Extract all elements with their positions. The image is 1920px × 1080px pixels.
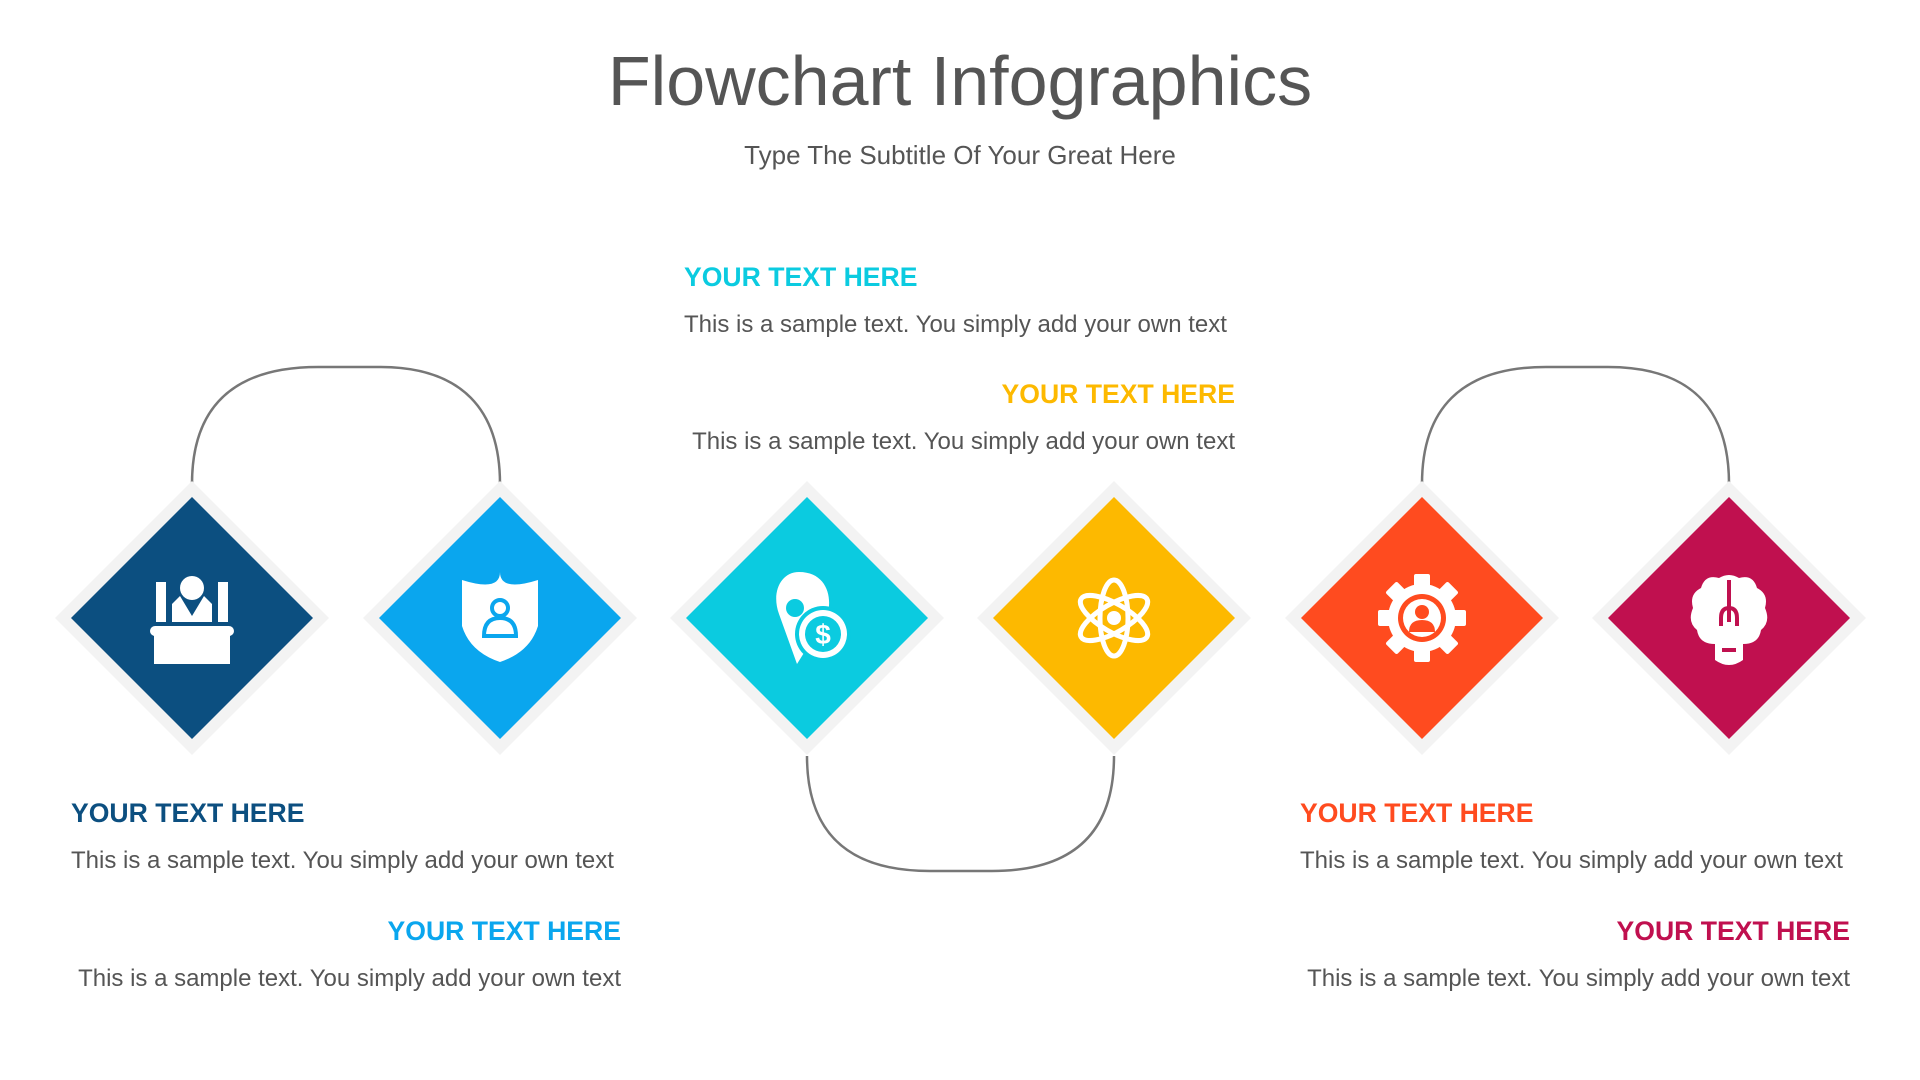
diamond 3: $	[815, 619, 831, 650]
diamond 5	[1285, 481, 1559, 755]
text block: bottom right 2: YOUR TEXT HERE	[1617, 916, 1850, 946]
text block: bottom right 1: This is a sample text. You simply add your own text	[1300, 847, 1843, 874]
text block: top center 1	[684, 262, 1227, 338]
text block: bottom right 2	[1307, 916, 1850, 992]
icon: atom	[1074, 580, 1154, 656]
text block: bottom left 1: This is a sample text. You simply add your own text	[71, 847, 614, 874]
text block: bottom left 2: YOUR TEXT HERE	[388, 916, 621, 946]
icon: shield user	[462, 572, 538, 662]
text block: top center 2: This is a sample text. You simply add your own text	[692, 428, 1235, 455]
text block: top center 2: YOUR TEXT HERE	[1002, 379, 1235, 409]
text block: bottom right 1	[1300, 798, 1843, 874]
connector: arc 3-4	[807, 756, 1114, 871]
text block: top center 1: This is a sample text. You simply add your own text	[684, 311, 1227, 338]
diamond 1	[55, 481, 329, 755]
icon: brain bulb	[1691, 575, 1767, 665]
subtitle: Type The Subtitle Of Your Great Here	[744, 140, 1176, 170]
text block: bottom left 2	[78, 916, 621, 992]
title: Flowchart Infographics	[608, 42, 1312, 120]
icon: speaker at podium	[150, 576, 234, 664]
diamond 2	[363, 481, 637, 755]
diamond 3	[670, 481, 944, 755]
diamond 4	[977, 481, 1251, 755]
text block: top center 2	[692, 379, 1235, 455]
text block: bottom left 1: YOUR TEXT HERE	[71, 798, 304, 828]
connector: arc 1-2	[192, 367, 500, 484]
text block: bottom left 1	[71, 798, 614, 874]
text block: bottom right 2: This is a sample text. You simply add your own text	[1307, 965, 1850, 992]
text block: top center 1: YOUR TEXT HERE	[684, 262, 917, 292]
connector: arc 5-6	[1422, 367, 1729, 484]
text block: bottom left 2: This is a sample text. You simply add your own text	[78, 965, 621, 992]
diamond 6	[1592, 481, 1866, 755]
icon: location with dollar	[776, 572, 829, 664]
icon: gear user	[1378, 574, 1466, 662]
text block: bottom right 1: YOUR TEXT HERE	[1300, 798, 1533, 828]
